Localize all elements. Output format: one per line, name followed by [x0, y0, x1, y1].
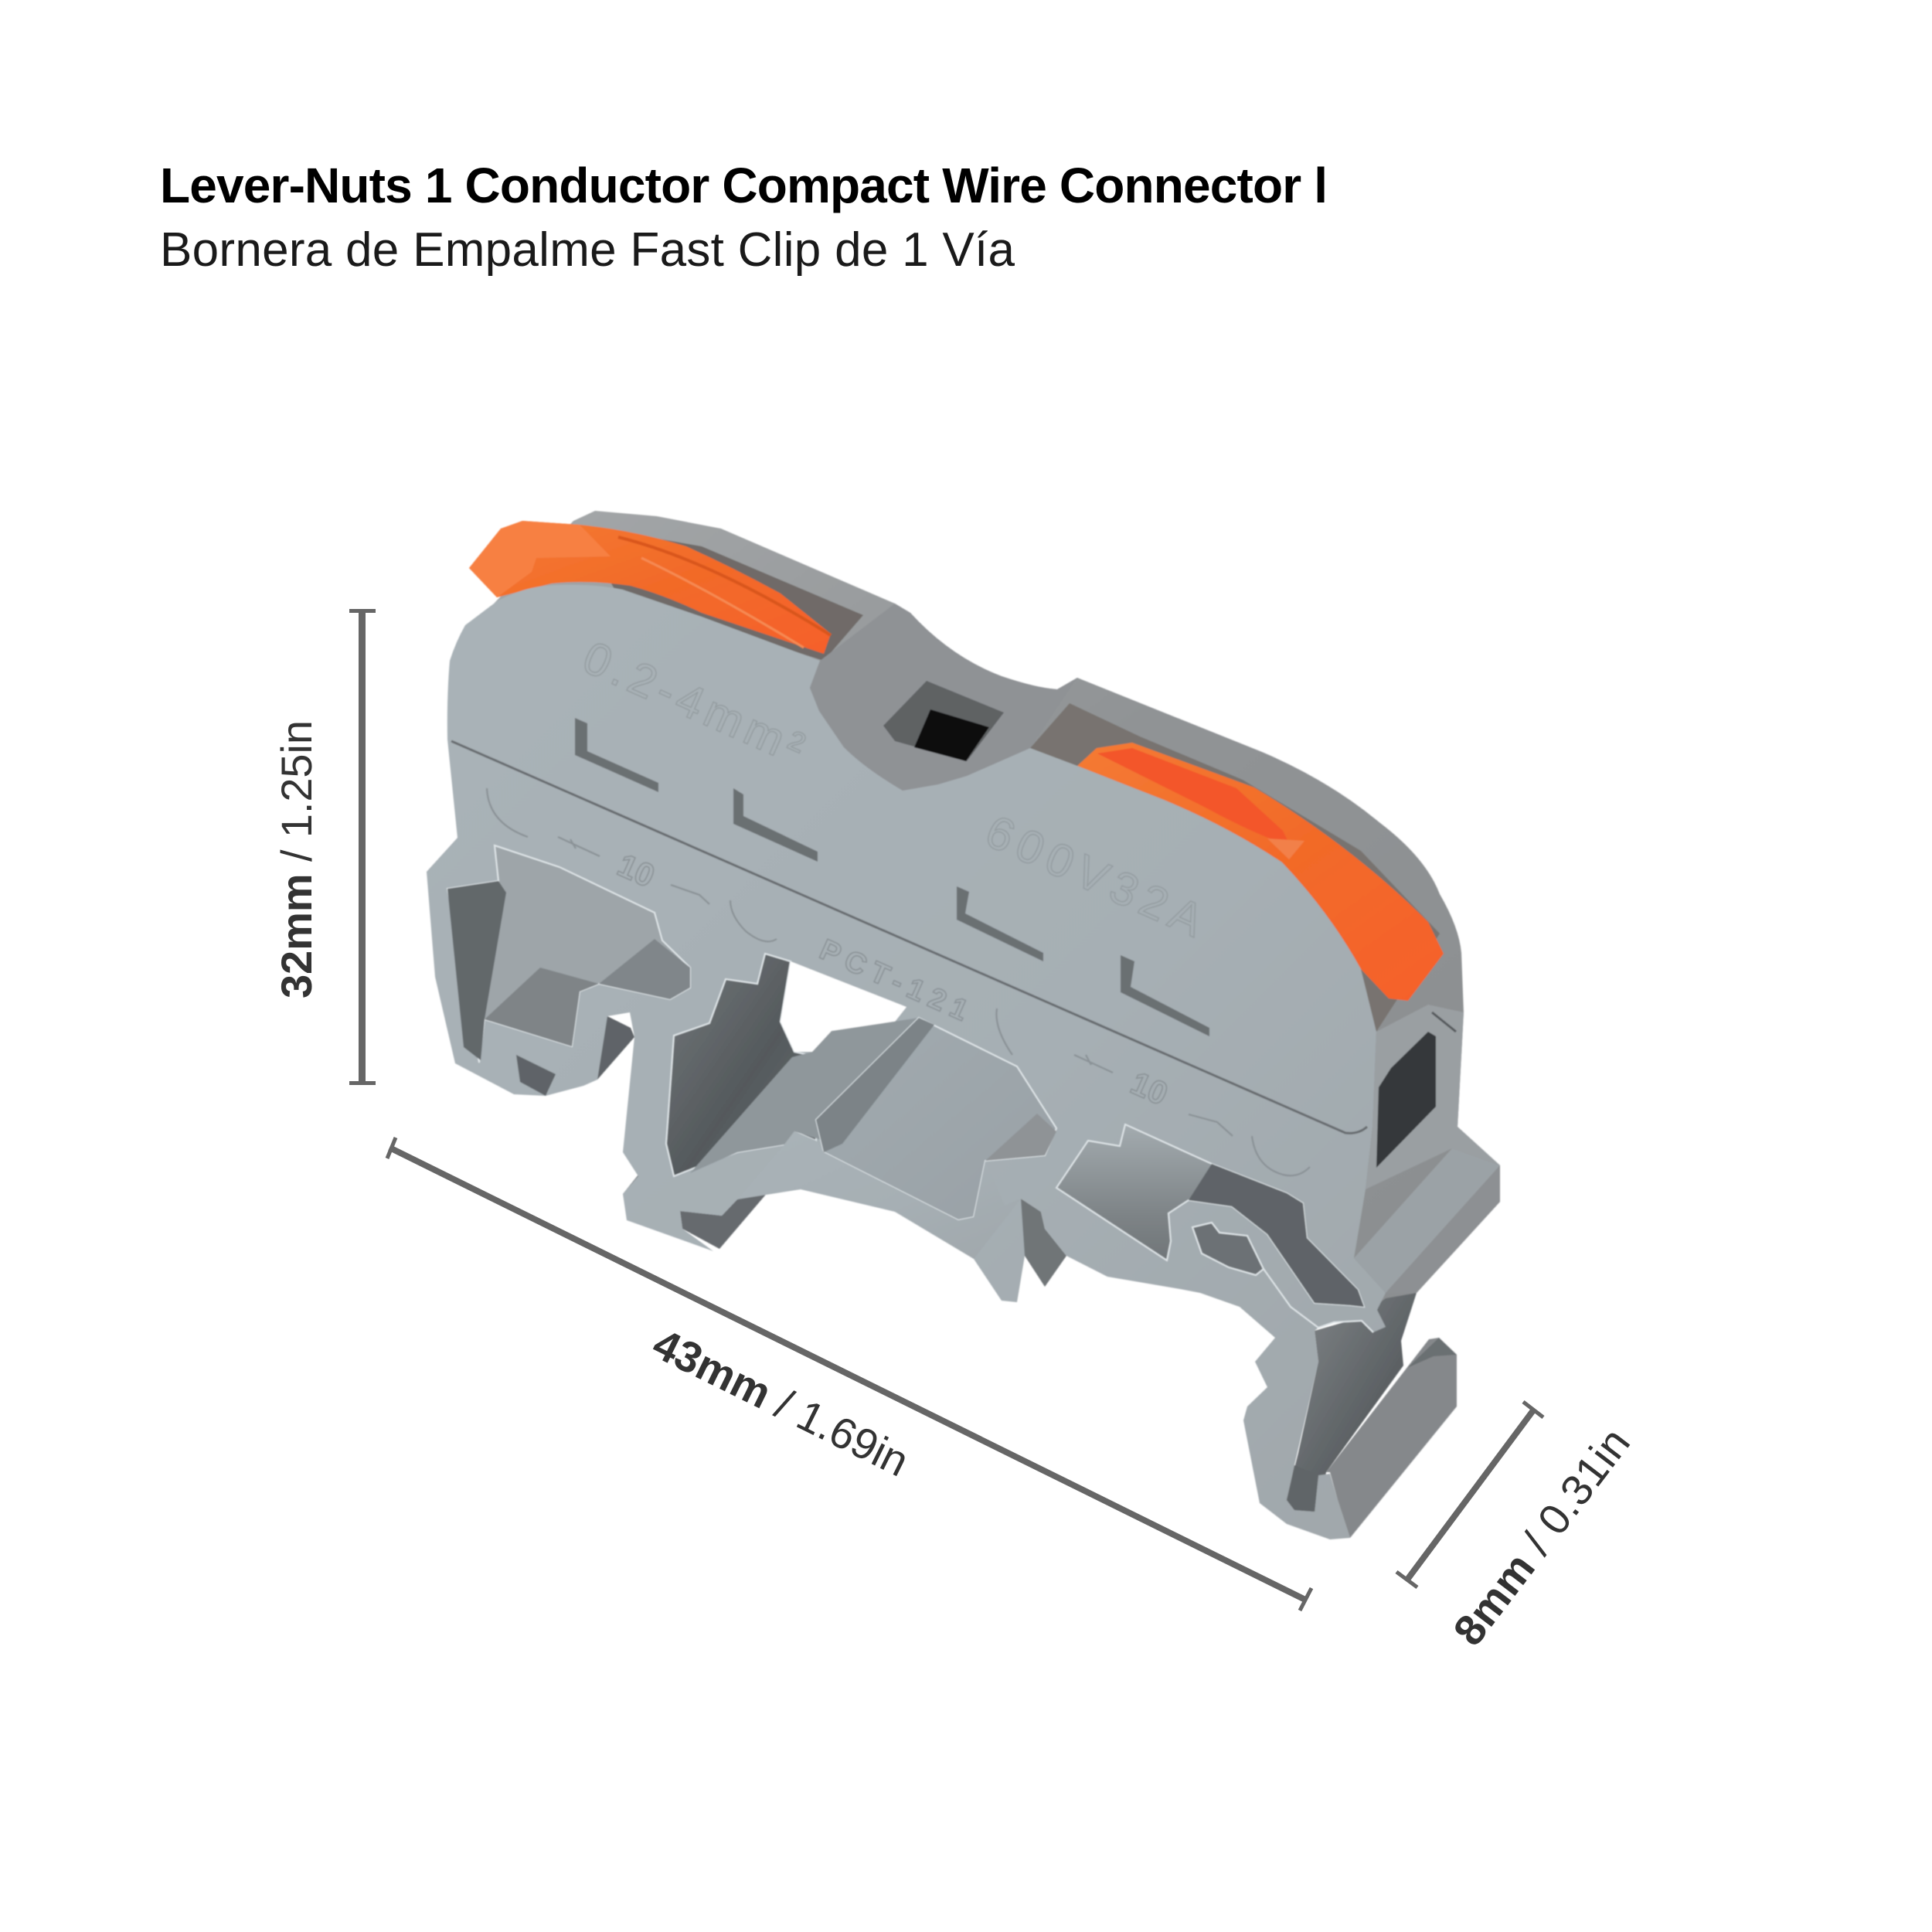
height bracket	[349, 609, 376, 1085]
rear dark pockets behind the face	[587, 1016, 1417, 1515]
centre window	[781, 961, 906, 1052]
dimension: length 43mm	[387, 1138, 1311, 1611]
front face of the housing	[427, 585, 1386, 1539]
spring arm slot	[1192, 1223, 1264, 1275]
embossed strip length left: 10	[612, 846, 660, 894]
housing seam line	[451, 741, 1367, 1133]
upper clip slot 4	[1121, 955, 1209, 1036]
rail saddle cylinder	[690, 1018, 1056, 1259]
left orange lever	[469, 521, 831, 654]
right side wire entry	[1366, 1005, 1500, 1189]
saddle rim around the square test port	[810, 604, 1077, 791]
upper clip slot 2	[733, 788, 818, 862]
right cavity	[1056, 1124, 1364, 1307]
right orange lever	[1077, 743, 1444, 1001]
embossed strip length right: 10	[1125, 1064, 1173, 1112]
upper clip slot 1	[575, 718, 658, 792]
spring arm highlight line	[1264, 1269, 1373, 1332]
rear housing and rim	[479, 511, 1500, 1314]
lower hook block	[1287, 1338, 1457, 1538]
dimension: height 32mm	[272, 609, 376, 1085]
connector product illustration	[427, 511, 1500, 1539]
embossed label: rating: 600V32A	[978, 805, 1211, 947]
length label: 43mm / 1.69in	[645, 1319, 917, 1486]
width bracket	[1396, 1402, 1543, 1587]
right tray foot	[1354, 1148, 1500, 1293]
left lever slot	[576, 526, 863, 661]
square test port	[883, 681, 1004, 761]
upper clip slot 3	[957, 886, 1043, 961]
width label: 8mm / 0.31in	[1444, 1419, 1639, 1655]
subtitle: Bornera de Empalme Fast Clip de 1 Vía	[160, 223, 1015, 277]
embossed label: model: PCT-121	[815, 934, 973, 1028]
centre left cavity	[666, 954, 819, 1176]
title: Lever-Nuts 1 Conductor Compact Wire Connector l	[160, 158, 1328, 213]
embossed label: wire size: 0.2-4mm²	[576, 631, 812, 774]
height label: 32mm / 1.25in	[272, 720, 321, 998]
left leg cavity	[447, 845, 690, 1096]
dimension: width 8mm	[1396, 1402, 1639, 1655]
length bracket	[387, 1138, 1311, 1611]
right lever slot	[1030, 703, 1440, 1032]
embossed arrows and circles	[487, 788, 1310, 1175]
darker right cavity wall	[1189, 1164, 1364, 1307]
